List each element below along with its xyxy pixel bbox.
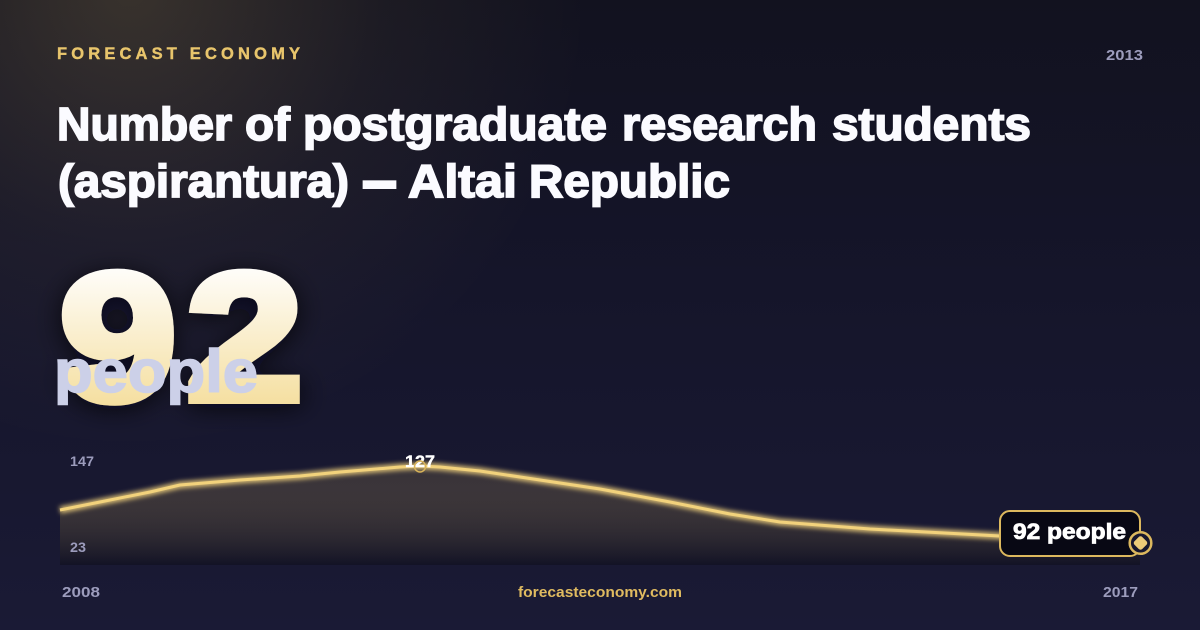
title: of [245,98,291,150]
peak label: 127 [405,453,435,471]
headline value: 92 [60,236,303,438]
title: Republic [529,155,730,207]
x-axis start label: 2008 [62,584,100,601]
start-of-range year label: 2013 [1106,47,1143,64]
title: postgraduate [303,98,607,150]
current value callout: 92 people [1013,519,1126,544]
title [57,98,1031,207]
title: — [364,155,395,207]
title: Number [57,98,232,150]
data line [60,466,1140,542]
peak marker [414,461,426,472]
area under line [60,466,1140,565]
y-axis max label: 147 [70,454,94,469]
y-axis min label: 23 [70,540,87,555]
line chart [60,453,1151,565]
current value marker [1130,532,1151,554]
source URL: forecasteconomy.com [518,584,682,601]
title: Altai [408,155,517,207]
title: students [832,98,1031,150]
title: (aspirantura) [58,155,349,207]
eyebrow: brand label: FORECAST ECONOMY [57,45,300,63]
title: research [622,98,817,150]
x-axis end label: 2017 [1103,584,1138,601]
line glow [60,466,1140,542]
current value callout [1000,511,1140,556]
unit label: people [54,338,258,405]
